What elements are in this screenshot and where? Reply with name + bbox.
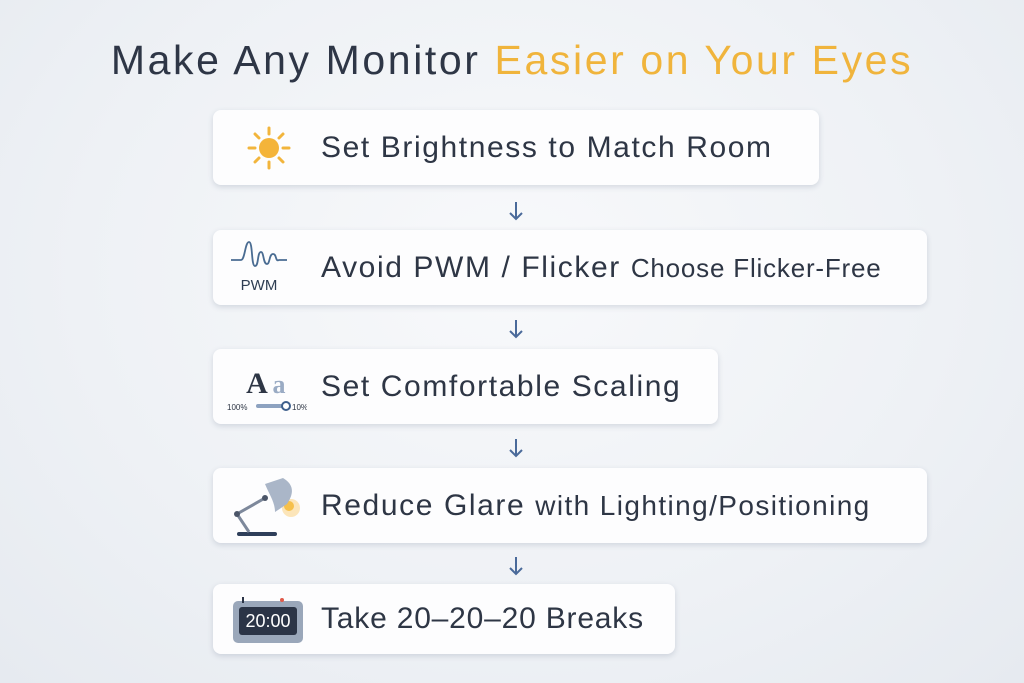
panel: PWM — [213, 230, 927, 305]
icon: PWM wave — [231, 241, 287, 294]
icon: lamp — [234, 478, 300, 536]
icon: Aa slider — [227, 367, 307, 412]
icon: timer — [233, 597, 303, 643]
text: Set Brightness to Match Room — [321, 131, 773, 164]
arrow — [509, 202, 523, 220]
arrow — [509, 439, 523, 458]
panel: scaling — [213, 349, 718, 424]
title: Make Any Monitor Easier on Your Eyes — [111, 37, 913, 83]
text: Set Comfortable Scaling — [321, 370, 681, 403]
icon: Aa slider: a — [272, 370, 286, 399]
panel: glare — [213, 468, 927, 543]
panel: breaks — [213, 584, 675, 654]
text: Avoid PWM / Flicker Choose Flicker-Free — [321, 251, 882, 284]
text: Take 20–20–20 Breaks — [321, 602, 644, 635]
icon: Aa slider: 100% — [227, 403, 247, 412]
icon: timer: 20:00 — [245, 611, 291, 631]
panel: brightness — [213, 110, 819, 185]
arrow — [509, 320, 523, 338]
arrow — [509, 557, 523, 576]
text: Reduce Glare with Lighting/Positioning — [321, 489, 871, 522]
icon: sun — [248, 126, 290, 170]
icon: PWM wave: PWM — [241, 277, 277, 294]
icon: Aa slider: A — [246, 367, 268, 400]
